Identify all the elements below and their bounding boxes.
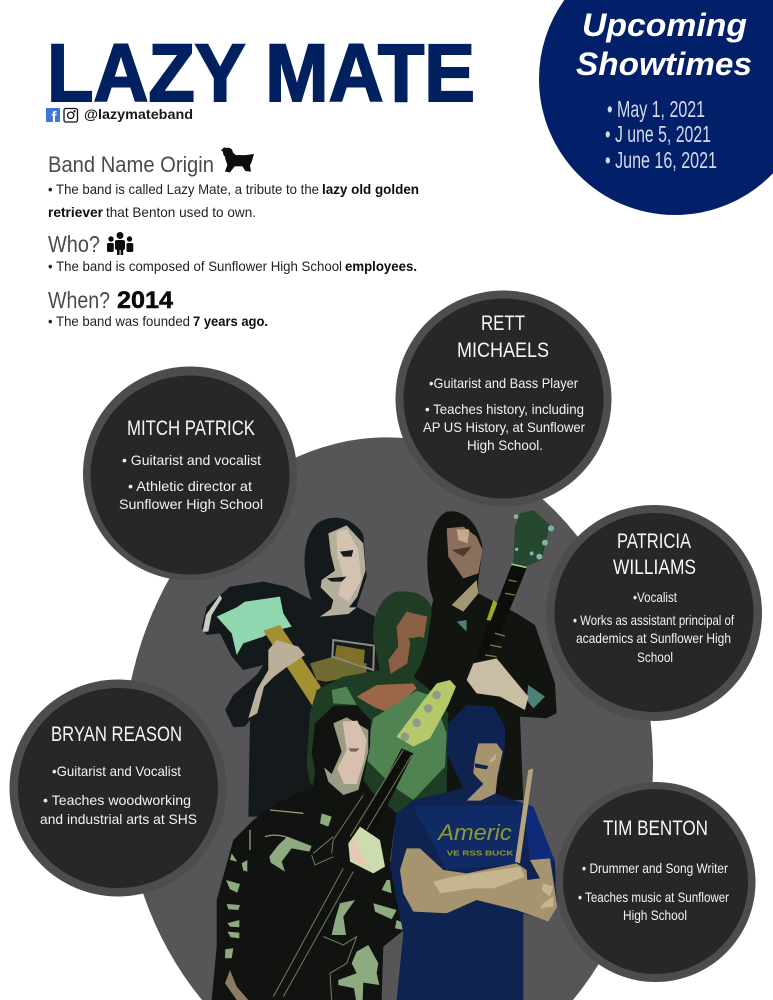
text block: who: employees. xyxy=(345,258,417,274)
details: •Guitarist and Vocalist xyxy=(52,763,181,779)
details: • Teaches music at Sunflower xyxy=(578,889,729,905)
details: academics at Sunflower High xyxy=(576,630,731,646)
heading: When? 2014: 2014 xyxy=(117,287,174,314)
details xyxy=(40,763,197,827)
showtimes heading xyxy=(576,7,752,82)
details: High School. xyxy=(467,437,543,453)
name: TIM BENTON xyxy=(603,817,708,840)
panel: upcoming showtimes xyxy=(539,0,773,215)
panel: Patricia Williams xyxy=(546,505,762,721)
panel: Rett Michaels xyxy=(396,290,612,506)
showtimes dates: • J une 5, 2021 xyxy=(605,121,711,147)
name xyxy=(613,530,696,579)
heading: Band Name Origin: Band Name Origin xyxy=(48,152,214,177)
text block: band name origin: retriever xyxy=(48,204,104,220)
details xyxy=(573,589,734,665)
showtimes dates: • June 16, 2021 xyxy=(605,147,717,173)
figure: Tim Benton with drumstick xyxy=(390,705,557,1000)
icon: instagram xyxy=(64,108,78,122)
details: Sunflower High School xyxy=(119,496,263,512)
heading: When? 2014: When? xyxy=(48,287,110,313)
panel: Tim Benton xyxy=(556,782,756,982)
details: • Teaches history, including xyxy=(425,401,584,417)
social handle text: @lazymateband xyxy=(84,106,193,122)
name: BRYAN REASON xyxy=(51,723,182,746)
heading: Who?: Who? xyxy=(48,231,100,257)
details: • Drummer and Song Writer xyxy=(582,860,728,876)
name: RETT xyxy=(481,312,525,335)
grey backdrop xyxy=(122,437,653,1000)
photo: band members xyxy=(202,510,557,1000)
shirt graphic: Americ xyxy=(436,820,512,845)
showtimes heading: Showtimes xyxy=(576,46,752,82)
name: PATRICIA xyxy=(617,530,691,553)
details: • Athletic director at xyxy=(128,478,252,494)
icon: people xyxy=(107,232,133,255)
shirt graphic: VE RSS BUCK xyxy=(447,848,514,857)
figure: Rett Michaels with guitar xyxy=(413,510,557,800)
details: • Teaches woodworking xyxy=(43,792,191,808)
showtimes dates xyxy=(605,96,717,173)
name: MITCH PATRICK xyxy=(127,417,255,440)
icon: facebook: f xyxy=(52,109,58,126)
text block: when xyxy=(48,313,268,329)
showtimes dates: • May 1, 2021 xyxy=(607,96,705,122)
details: School xyxy=(637,649,673,665)
text block: who: • The band is composed of Sunflower High School xyxy=(48,258,342,274)
details: High School xyxy=(623,907,687,923)
name: WILLIAMS xyxy=(613,556,696,579)
text block: when: 7 years ago. xyxy=(193,313,268,329)
panel: Bryan Reason xyxy=(10,680,226,896)
figure: Patricia Williams xyxy=(307,591,448,833)
text block: band name origin: that Benton used to own. xyxy=(106,204,256,220)
title: LAZY MATE: LAZY MATE xyxy=(47,28,475,119)
icon: facebook xyxy=(46,108,60,126)
details xyxy=(423,375,585,453)
panel: Mitch Patrick xyxy=(83,366,297,580)
text block: band name origin: lazy old golden xyxy=(322,181,419,197)
icon: golden retriever xyxy=(221,147,254,172)
details: • Works as assistant principal of xyxy=(573,612,734,628)
social handle row xyxy=(46,106,193,126)
name: MICHAELS xyxy=(457,339,549,362)
text block: band name origin: • The band is called Lazy Mate, a tribute to the xyxy=(48,181,319,197)
figure: Mitch Patrick with guitar xyxy=(202,518,380,817)
text block: band name origin xyxy=(48,181,419,220)
text block: when: • The band was founded xyxy=(48,313,190,329)
details xyxy=(578,860,729,923)
figure: Bryan Reason with bass xyxy=(212,680,456,1000)
details: •Guitarist and Bass Player xyxy=(429,375,578,391)
heading: When? 2014 xyxy=(48,287,174,314)
name xyxy=(457,312,549,362)
details: AP US History, at Sunflower xyxy=(423,419,585,435)
details: •Vocalist xyxy=(633,589,677,605)
details: and industrial arts at SHS xyxy=(40,811,197,827)
details: • Guitarist and vocalist xyxy=(122,452,261,468)
details xyxy=(119,452,263,512)
shirt graphic xyxy=(436,820,514,857)
showtimes heading: Upcoming xyxy=(582,7,747,43)
